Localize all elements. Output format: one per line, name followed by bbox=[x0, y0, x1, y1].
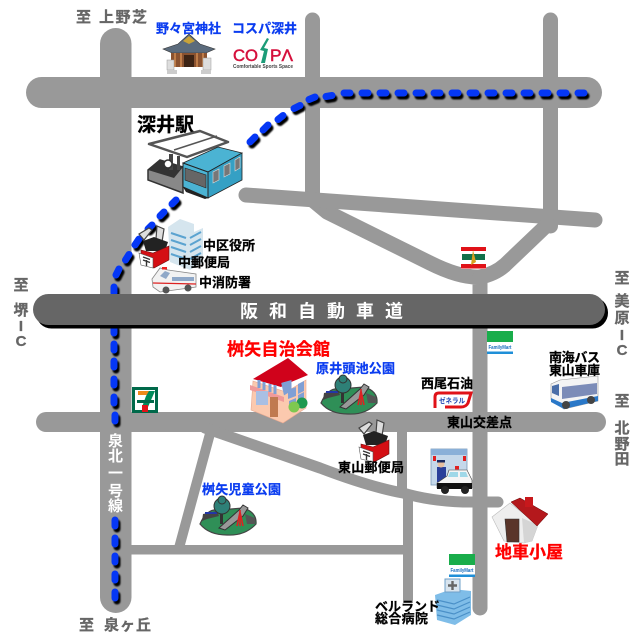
logo: COSPA: PΛ bbox=[270, 46, 294, 65]
direction: Sakai IC: 至 bbox=[13, 277, 29, 294]
road label: Senboku No.1: 泉 bbox=[108, 432, 123, 450]
road label: Senboku No.1: 北 bbox=[108, 448, 123, 465]
logo: General oil bbox=[435, 393, 471, 408]
label: Belland general hospital: ベルランド bbox=[375, 599, 440, 614]
direction: Mihara IC: C bbox=[617, 342, 628, 359]
icon: hospital bbox=[435, 579, 471, 625]
label: Higashiyama post office: 東山郵便局 bbox=[338, 460, 404, 475]
road label: Senboku No.1: 一 bbox=[108, 465, 123, 482]
direction: Uenoshiba: 至 bbox=[76, 9, 91, 26]
label: Nankai bus depot: 東山車庫 bbox=[549, 363, 600, 378]
logo: COSPA: Comfortable Sports Space bbox=[233, 64, 293, 70]
direction: Sakai IC: C bbox=[16, 333, 27, 350]
direction: Mihara IC: 原 bbox=[614, 310, 630, 327]
direction: Sakai IC: I bbox=[19, 318, 23, 335]
logo: COSPA: CO bbox=[233, 46, 258, 65]
label: Nishio oil: 西尾石油 bbox=[421, 376, 473, 391]
direction: Kitanoda: 北 bbox=[614, 420, 630, 437]
expressway bbox=[33, 294, 608, 328]
direction: Izumigaoka: 泉ヶ丘 bbox=[104, 616, 151, 634]
logo: General oil: ゼネラル bbox=[439, 396, 465, 405]
railway line: blue dashed track bbox=[114, 93, 584, 598]
road label: Senboku No.1: 線 bbox=[108, 497, 123, 515]
label: COSPA Fukai: コスパ深井 bbox=[232, 21, 297, 36]
icon: danjiri hut bbox=[492, 497, 548, 543]
direction: Mihara IC: 美 bbox=[614, 292, 630, 310]
icon: bus bbox=[551, 376, 598, 409]
direction: Uenoshiba: 上野芝 bbox=[99, 9, 147, 26]
label: Nonomiya shrine: 野々宮神社 bbox=[156, 21, 221, 36]
label: danjiri hut: 地車小屋 bbox=[495, 543, 563, 562]
direction: Mihara IC: I bbox=[620, 327, 624, 344]
icon: 7-Eleven bbox=[132, 387, 158, 413]
label: Naka fire station: 中消防署 bbox=[199, 275, 251, 290]
icon: ward office building bbox=[168, 219, 203, 270]
icon: community hall house bbox=[250, 358, 308, 423]
label: Naka post office: 中郵便局 bbox=[178, 255, 230, 270]
label: Harai-gashira pond park: 原井頭池公園 bbox=[316, 361, 395, 376]
road label: Senboku No.1: 号 bbox=[108, 483, 123, 500]
label: Masuya children's park: 桝矢児童公園 bbox=[202, 482, 281, 497]
railway line shadow bbox=[116, 96, 586, 601]
icon: pond park bbox=[321, 375, 377, 414]
label: Fukai station: 深井駅 bbox=[137, 114, 194, 136]
label: Belland general hospital: 総合病院 bbox=[375, 611, 428, 626]
icon: Higashiyama post office bbox=[359, 420, 389, 462]
icon: FamilyMart north bbox=[487, 331, 513, 354]
label: Masuya community association: 桝矢自治会館 bbox=[227, 339, 330, 359]
direction: Mihara IC: 至 bbox=[614, 270, 630, 287]
icon: shop sign bbox=[461, 247, 486, 269]
icon: station and train bbox=[148, 131, 242, 199]
expressway label: 阪和自動車道 bbox=[240, 302, 403, 322]
label: Naka ward office: 中区役所 bbox=[203, 238, 255, 253]
direction: Sakai IC: 堺 bbox=[13, 302, 29, 319]
icon: police box bbox=[431, 449, 472, 494]
icon: children's park bbox=[200, 496, 256, 535]
icon: FamilyMart south bbox=[449, 554, 475, 577]
icon: ambulance bbox=[152, 267, 196, 294]
icon: shrine bbox=[163, 34, 215, 74]
direction: Kitanoda: 野 bbox=[614, 436, 630, 453]
icon: Naka post office bbox=[139, 226, 169, 268]
direction: Kitanoda: 田 bbox=[614, 451, 630, 468]
label: Higashiyama intersection: 東山交差点 bbox=[447, 415, 512, 430]
label: Nankai bus depot: 南海バス bbox=[549, 350, 600, 365]
direction: Kitanoda: 至 bbox=[614, 393, 630, 410]
logo: COSPA bbox=[233, 38, 294, 70]
direction: Izumigaoka: 至 bbox=[79, 617, 94, 634]
